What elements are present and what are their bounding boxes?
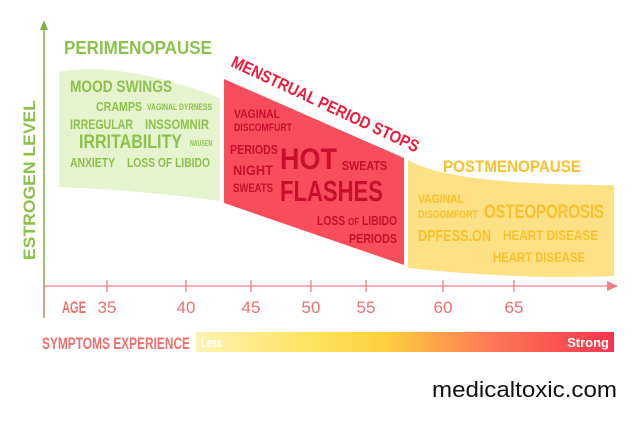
y axis: estrogen level <box>40 20 48 318</box>
panel: perimenopause: VAGINAL DYRNESS <box>147 102 212 112</box>
label: symptoms experience: SYMPTOMS EXPERIENCE <box>42 334 190 353</box>
x axis: age <box>44 280 618 316</box>
panel: perimenopause: PERIMENOPAUSE <box>64 38 212 58</box>
panel: perimenopause: NAUSEN <box>190 139 212 148</box>
panel: menstrual period stops: SWEATS <box>233 181 273 195</box>
panel: menstrual period stops <box>224 52 422 265</box>
panel: postmenopause: VAGINAL <box>418 192 464 206</box>
panel: menstrual period stops: HOT <box>280 143 337 176</box>
panel: postmenopause: HEART DISEASE <box>493 249 585 265</box>
panel: postmenopause: DPFESS.ON <box>418 228 491 245</box>
panel: postmenopause: DISGOMFORT <box>418 209 478 221</box>
panel: menstrual period stops: LOSS OF LIBIDO <box>317 213 397 228</box>
age labels: 60 <box>434 298 452 317</box>
gradient bar: less to strong: Strong <box>567 335 609 350</box>
age labels <box>62 298 523 317</box>
panel: postmenopause: OSTEOPOROSIS <box>484 202 604 223</box>
panel: menstrual period stops: SWEATS <box>342 158 387 173</box>
panel: postmenopause <box>408 157 614 277</box>
panel: perimenopause: IRRITABILITY <box>79 132 182 153</box>
panel: menstrual period stops: PERIODS <box>230 142 278 157</box>
panel: postmenopause: HEART DISEASE <box>503 227 598 243</box>
age labels: 40 <box>177 298 195 317</box>
gradient bar: less to strong: Less <box>201 335 222 350</box>
axis label: estrogen level: ESTROGEN LEVEL <box>20 100 39 260</box>
panel: menstrual period stops: PERIODS <box>349 231 397 246</box>
panel: perimenopause: IRREGULAR <box>70 116 133 132</box>
panel: postmenopause: POSTMENOPAUSE <box>443 157 581 176</box>
footer: source: medicaltoxic.com <box>432 377 617 402</box>
panel: menstrual period stops: MENSTRUAL PERIOD STOPS <box>228 52 422 156</box>
age labels: AGE <box>62 298 86 317</box>
panel: perimenopause: LOSS OF LIBIDO <box>127 155 210 170</box>
panel: perimenopause: ANXIETY <box>70 155 115 170</box>
gradient bar: less to strong <box>196 332 614 352</box>
age labels: 65 <box>505 298 523 317</box>
panel: perimenopause: MOOD SWINGS <box>70 77 172 96</box>
panel: perimenopause <box>59 38 220 201</box>
panel: perimenopause: CRAMPS <box>96 99 142 114</box>
panel: menstrual period stops: DISCOMFURT <box>234 122 292 134</box>
panel: menstrual period stops: VAGINAL <box>234 107 280 121</box>
age labels: 35 <box>98 298 116 317</box>
age labels: 50 <box>302 298 320 317</box>
panel: menstrual period stops: NIGHT <box>233 162 273 178</box>
panel: perimenopause: INSSOMNIR <box>145 116 209 132</box>
age labels: 45 <box>242 298 260 317</box>
panel: menstrual period stops: FLASHES <box>280 176 383 208</box>
age labels: 55 <box>357 298 375 317</box>
